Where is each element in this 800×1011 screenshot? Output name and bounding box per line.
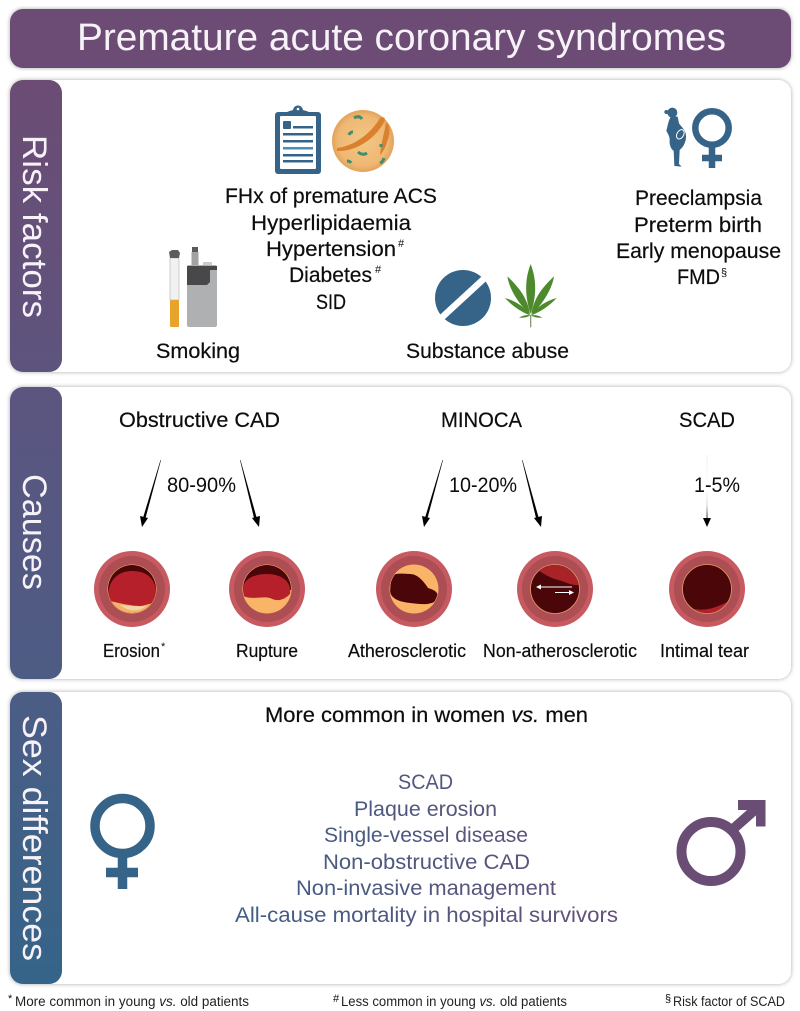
sex differences side label: Sex differences: [15, 715, 53, 961]
artery labels: Atherosclerotic: [348, 641, 466, 661]
list of sex differences: Non-obstructive CAD: [323, 851, 530, 874]
cause headings: SCAD: [679, 409, 735, 432]
artery labels: Non-atherosclerotic: [483, 641, 637, 661]
cause headings: MINOCA: [441, 409, 522, 432]
list of sex differences: Plaque erosion: [354, 798, 497, 821]
cause headings: [119, 409, 735, 432]
icon: clipboard: [275, 106, 321, 174]
list of sex differences: Single-vessel disease: [324, 824, 528, 847]
footnotes: §: [665, 993, 671, 1005]
risk factor list: general: SID: [316, 291, 346, 314]
cause headings: Obstructive CAD: [119, 409, 280, 432]
risk factor list: women: Early menopause: [616, 240, 781, 263]
percentages: [167, 474, 740, 497]
icon: pill: [435, 270, 491, 326]
artery labels: *: [161, 641, 166, 653]
risk factor list: general: Hyperlipidaemia: [251, 212, 411, 235]
icon: female symbol: [695, 111, 729, 168]
heading: More common in women vs. men: [265, 704, 588, 727]
footnotes: Risk factor of SCAD: [673, 994, 785, 1009]
icon: cannabis leaf: [505, 264, 557, 327]
panel: risk factors: [10, 80, 791, 372]
icon: male symbol: [682, 800, 766, 881]
footnotes: *: [8, 993, 13, 1005]
risk factor list: general: #: [375, 264, 382, 276]
sex differences side label: [10, 692, 62, 984]
footnotes: More common in young vs. old patients: [15, 994, 249, 1009]
risk factor list: general: #: [398, 238, 405, 250]
risk factor list: women: §: [721, 267, 727, 279]
arrows: [140, 455, 711, 527]
substance abuse label: Substance abuse: [406, 340, 569, 363]
risk factors side label: Risk factors: [15, 135, 53, 318]
causes side label: Causes: [15, 474, 53, 590]
panel: causes: [10, 387, 791, 679]
list of sex differences: SCAD: [398, 771, 453, 794]
artery: erosion: [94, 551, 170, 627]
footnotes: Less common in young vs. old patients: [341, 994, 567, 1009]
artery labels: Erosion: [103, 641, 160, 661]
icon: lipid cell: [332, 110, 394, 172]
risk factor list: women: FMD: [677, 266, 720, 289]
title: [10, 9, 791, 68]
risk factor list: general: FHx of premature ACS: [225, 185, 437, 208]
risk factor list: women: [616, 187, 781, 289]
footnotes: #: [333, 993, 340, 1005]
artery labels: Intimal tear: [660, 641, 749, 661]
artery labels: [103, 641, 749, 661]
footnotes: [8, 993, 785, 1009]
risk factor list: women: Preeclampsia: [635, 187, 762, 210]
risk factors side label: [10, 80, 62, 372]
causes side label: [10, 387, 62, 679]
icon: pregnant woman: [664, 108, 686, 167]
risk factor list: general: [225, 185, 437, 314]
list of sex differences: Non-invasive management: [296, 877, 556, 900]
artery: non-atherosclerotic: [517, 551, 593, 627]
percentages: 80-90%: [167, 474, 236, 497]
smoking label: Smoking: [156, 340, 240, 363]
list of sex differences: All-cause mortality in hospital survivors: [235, 904, 618, 927]
list of sex differences: [235, 771, 618, 927]
risk factor list: general: Diabetes: [289, 264, 372, 287]
title: Premature acute coronary syndromes: [77, 17, 726, 59]
panel: sex differences: [10, 692, 791, 984]
risk factor list: general: Hypertension: [266, 238, 396, 261]
artery labels: Rupture: [236, 641, 298, 661]
artery: atherosclerotic: [376, 551, 452, 627]
percentages: 1-5%: [694, 474, 740, 497]
icon: cigarette and vape: [169, 247, 217, 327]
risk factor list: women: Preterm birth: [634, 214, 762, 237]
percentages: 10-20%: [449, 474, 517, 497]
artery: rupture: [229, 551, 305, 627]
artery: intimal tear: [669, 551, 745, 627]
icon: female symbol large: [95, 798, 150, 889]
